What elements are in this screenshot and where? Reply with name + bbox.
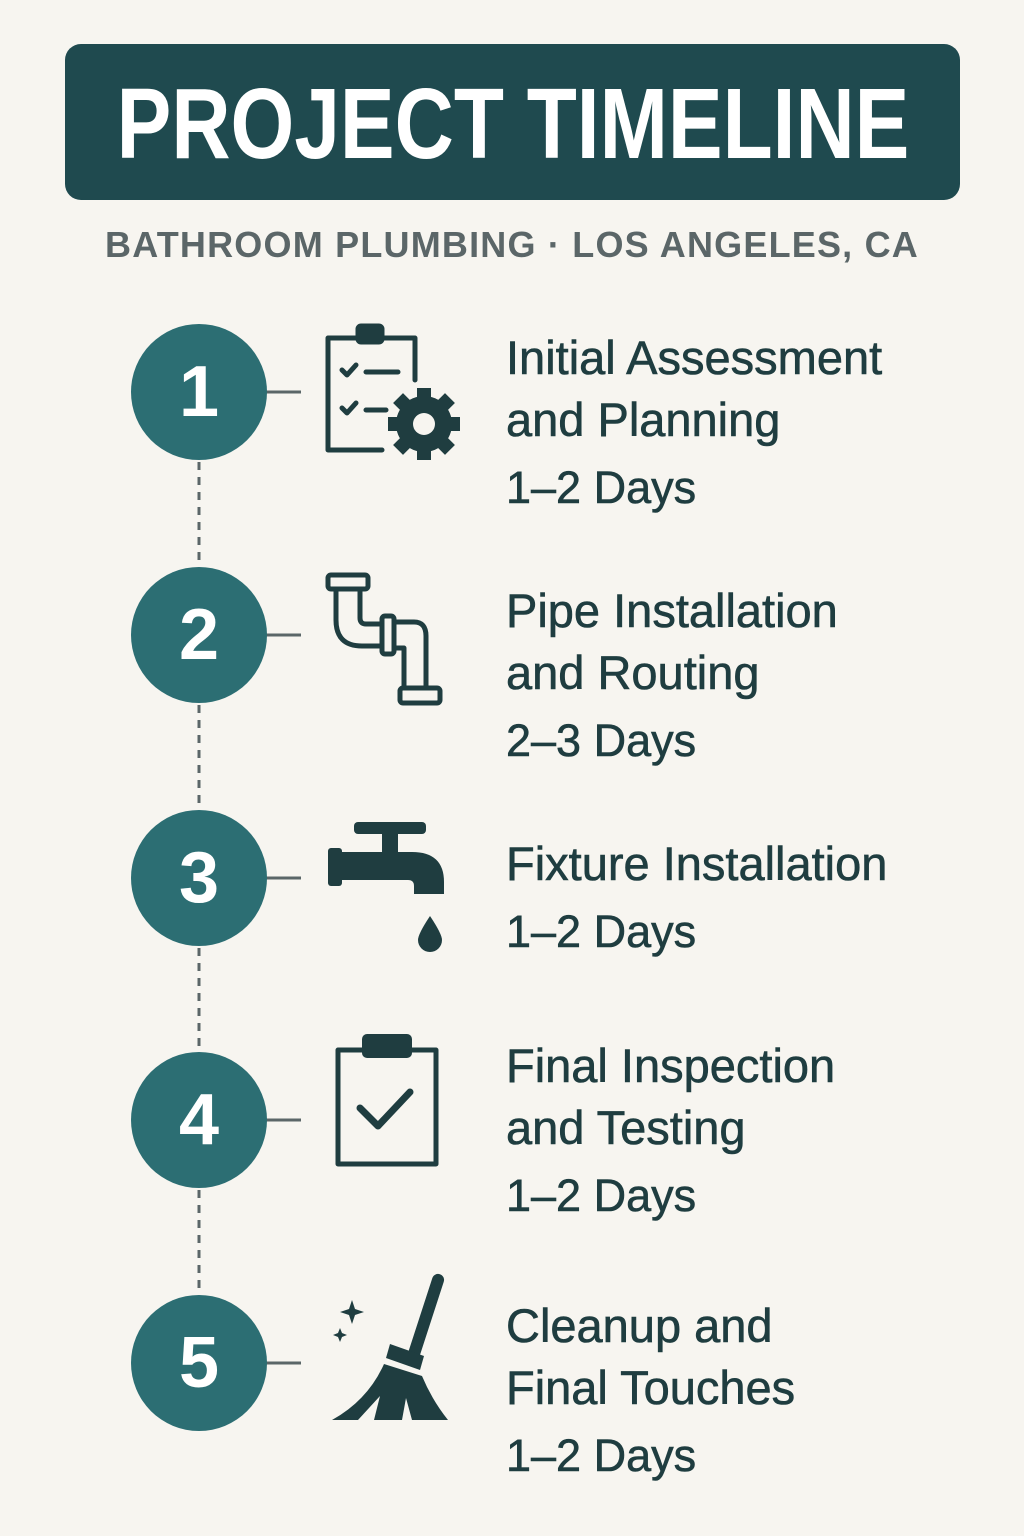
icon: clipboard with gear	[326, 324, 460, 460]
step 2 circle: 2	[179, 595, 219, 675]
step 4 text: Final Inspection	[506, 1039, 835, 1092]
step 4 circle: 4	[179, 1080, 219, 1160]
step 2 text	[506, 584, 838, 766]
step 4 text: 1–2 Days	[506, 1170, 696, 1221]
step 3 text: 1–2 Days	[506, 906, 696, 957]
icon: pipes	[326, 572, 442, 706]
step 5 circle: 5	[179, 1323, 219, 1403]
step 3 circle	[131, 810, 267, 946]
step 3 text	[506, 837, 887, 957]
step 2 circle	[131, 567, 267, 703]
step 4 text	[506, 1039, 835, 1221]
title banner: PROJECT TIMELINE	[116, 68, 909, 180]
step 3 text: Fixture Installation	[506, 837, 887, 890]
step 1 text: and Planning	[506, 393, 780, 446]
step 5 circle	[131, 1295, 267, 1431]
step 4 circle	[131, 1052, 267, 1188]
step 5 text: Final Touches	[506, 1361, 795, 1414]
title banner	[65, 44, 960, 200]
icon: faucet with drop	[328, 822, 444, 952]
step 1 circle	[131, 324, 267, 460]
step 3 circle: 3	[179, 838, 219, 918]
subtitle: BATHROOM PLUMBING · LOS ANGELES, CA	[105, 224, 919, 265]
step 1 text: 1–2 Days	[506, 462, 696, 513]
step 5 text: Cleanup and	[506, 1299, 773, 1352]
step 2 text: Pipe Installation	[506, 584, 838, 637]
step 1 text	[506, 331, 882, 513]
step 1 text: Initial Assessment	[506, 331, 882, 384]
step 5 text: 1–2 Days	[506, 1430, 696, 1481]
step 4 text: and Testing	[506, 1101, 746, 1154]
step 1 circle: 1	[179, 352, 219, 432]
step 5 text	[506, 1299, 795, 1481]
step 2 text: 2–3 Days	[506, 715, 696, 766]
step 2 text: and Routing	[506, 646, 759, 699]
icon: clipboard with check	[336, 1034, 438, 1166]
icon: broom with sparkles	[332, 1274, 448, 1420]
